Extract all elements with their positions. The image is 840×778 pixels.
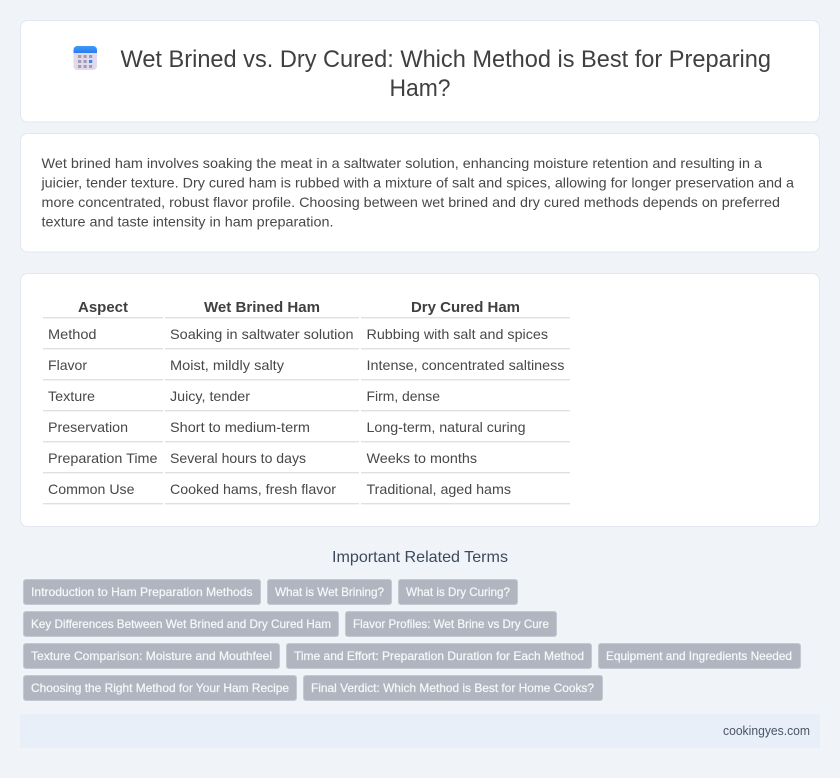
- table row: common use: Cooked hams, fresh flavor: [170, 481, 336, 497]
- table row: preparation time: Weeks to months: [366, 450, 477, 466]
- panel: related term tags: Final Verdict: Which Method is Best for Home Cooks?: [311, 681, 594, 695]
- footer: cookingyes.com: [723, 723, 810, 738]
- panel: related term tags: Flavor Profiles: Wet Brine vs Dry Cure: [353, 617, 549, 631]
- table row: method: Rubbing with salt and spices: [366, 326, 548, 342]
- table row: preparation time: Preparation Time: [48, 450, 158, 466]
- panel: related term tags: Introduction to Ham Preparation Methods: [31, 585, 252, 599]
- panel: related term tags: Time and Effort: Preparation Duration for Each Method: [294, 649, 584, 663]
- panel: related term tags: Equipment and Ingredients Needed: [606, 649, 792, 663]
- table header: [78, 299, 520, 316]
- panel: related term tags: What is Dry Curing?: [406, 585, 510, 599]
- panel: related term tags: Texture Comparison: Moisture and Mouthfeel: [31, 649, 272, 663]
- panel: related term tags: [24, 580, 800, 700]
- title: Ham?: [390, 75, 450, 102]
- table row: preservation: Preservation: [48, 419, 128, 435]
- icon: calendar: [74, 46, 97, 70]
- text block: introduction paragraph: more concentrated, robust flavor profile. Choosing between wet brined and dry cured methods depends on preferred: [42, 194, 780, 210]
- title: [120, 46, 771, 102]
- table row: texture: [48, 388, 440, 404]
- panel: related term tags: Key Differences Between Wet Brined and Dry Cured Ham: [31, 617, 331, 631]
- text block: introduction paragraph: Wet brined ham involves soaking the meat in a saltwater solution, enhancing moisture retention and resulting in a: [42, 155, 762, 171]
- table row: preparation time: Several hours to days: [170, 450, 306, 466]
- table header: Wet Brined Ham: [204, 299, 320, 316]
- table header: Aspect: [78, 299, 128, 316]
- table row: common use: Common Use: [48, 481, 135, 497]
- panel: comparison table: [20, 274, 820, 526]
- table row: common use: Traditional, aged hams: [366, 481, 511, 497]
- panel: related term tags: Choosing the Right Method for Your Ham Recipe: [31, 681, 289, 695]
- table row: flavor: [48, 357, 564, 373]
- table row: flavor: Moist, mildly salty: [170, 357, 284, 373]
- table row: texture: Firm, dense: [366, 388, 440, 404]
- table row: flavor: Intense, concentrated saltiness: [366, 357, 564, 373]
- table row: method: Method: [48, 326, 96, 342]
- table row: method: [48, 326, 548, 342]
- table row: texture: Texture: [48, 388, 95, 404]
- title: Wet Brined vs. Dry Cured: Which Method is Best for Preparing: [120, 46, 771, 73]
- panel: introduction: [20, 134, 820, 252]
- heading: related terms: Important Related Terms: [332, 549, 508, 566]
- table row: preservation: [48, 419, 526, 435]
- text block: introduction paragraph: juicier, tender texture. Dry cured ham is rubbed with a mixture of salt and spices, allowing for longer preservation and a: [40, 174, 794, 190]
- text block: introduction paragraph: [40, 155, 794, 230]
- table row: preparation time: [48, 450, 477, 466]
- footer: [20, 714, 820, 748]
- text block: introduction paragraph: texture and taste intensity in ham preparation.: [42, 214, 334, 230]
- table row: flavor: Flavor: [48, 357, 87, 373]
- table row: preservation: Long-term, natural curing: [366, 419, 526, 435]
- table row: method: Soaking in saltwater solution: [170, 326, 354, 342]
- table header: Dry Cured Ham: [411, 299, 520, 316]
- panel: title card: [20, 20, 820, 122]
- panel: related term tags: What is Wet Brining?: [275, 585, 384, 599]
- table row: common use: [48, 481, 511, 497]
- table row: preservation: Short to medium-term: [170, 419, 310, 435]
- table row: texture: Juicy, tender: [170, 388, 250, 404]
